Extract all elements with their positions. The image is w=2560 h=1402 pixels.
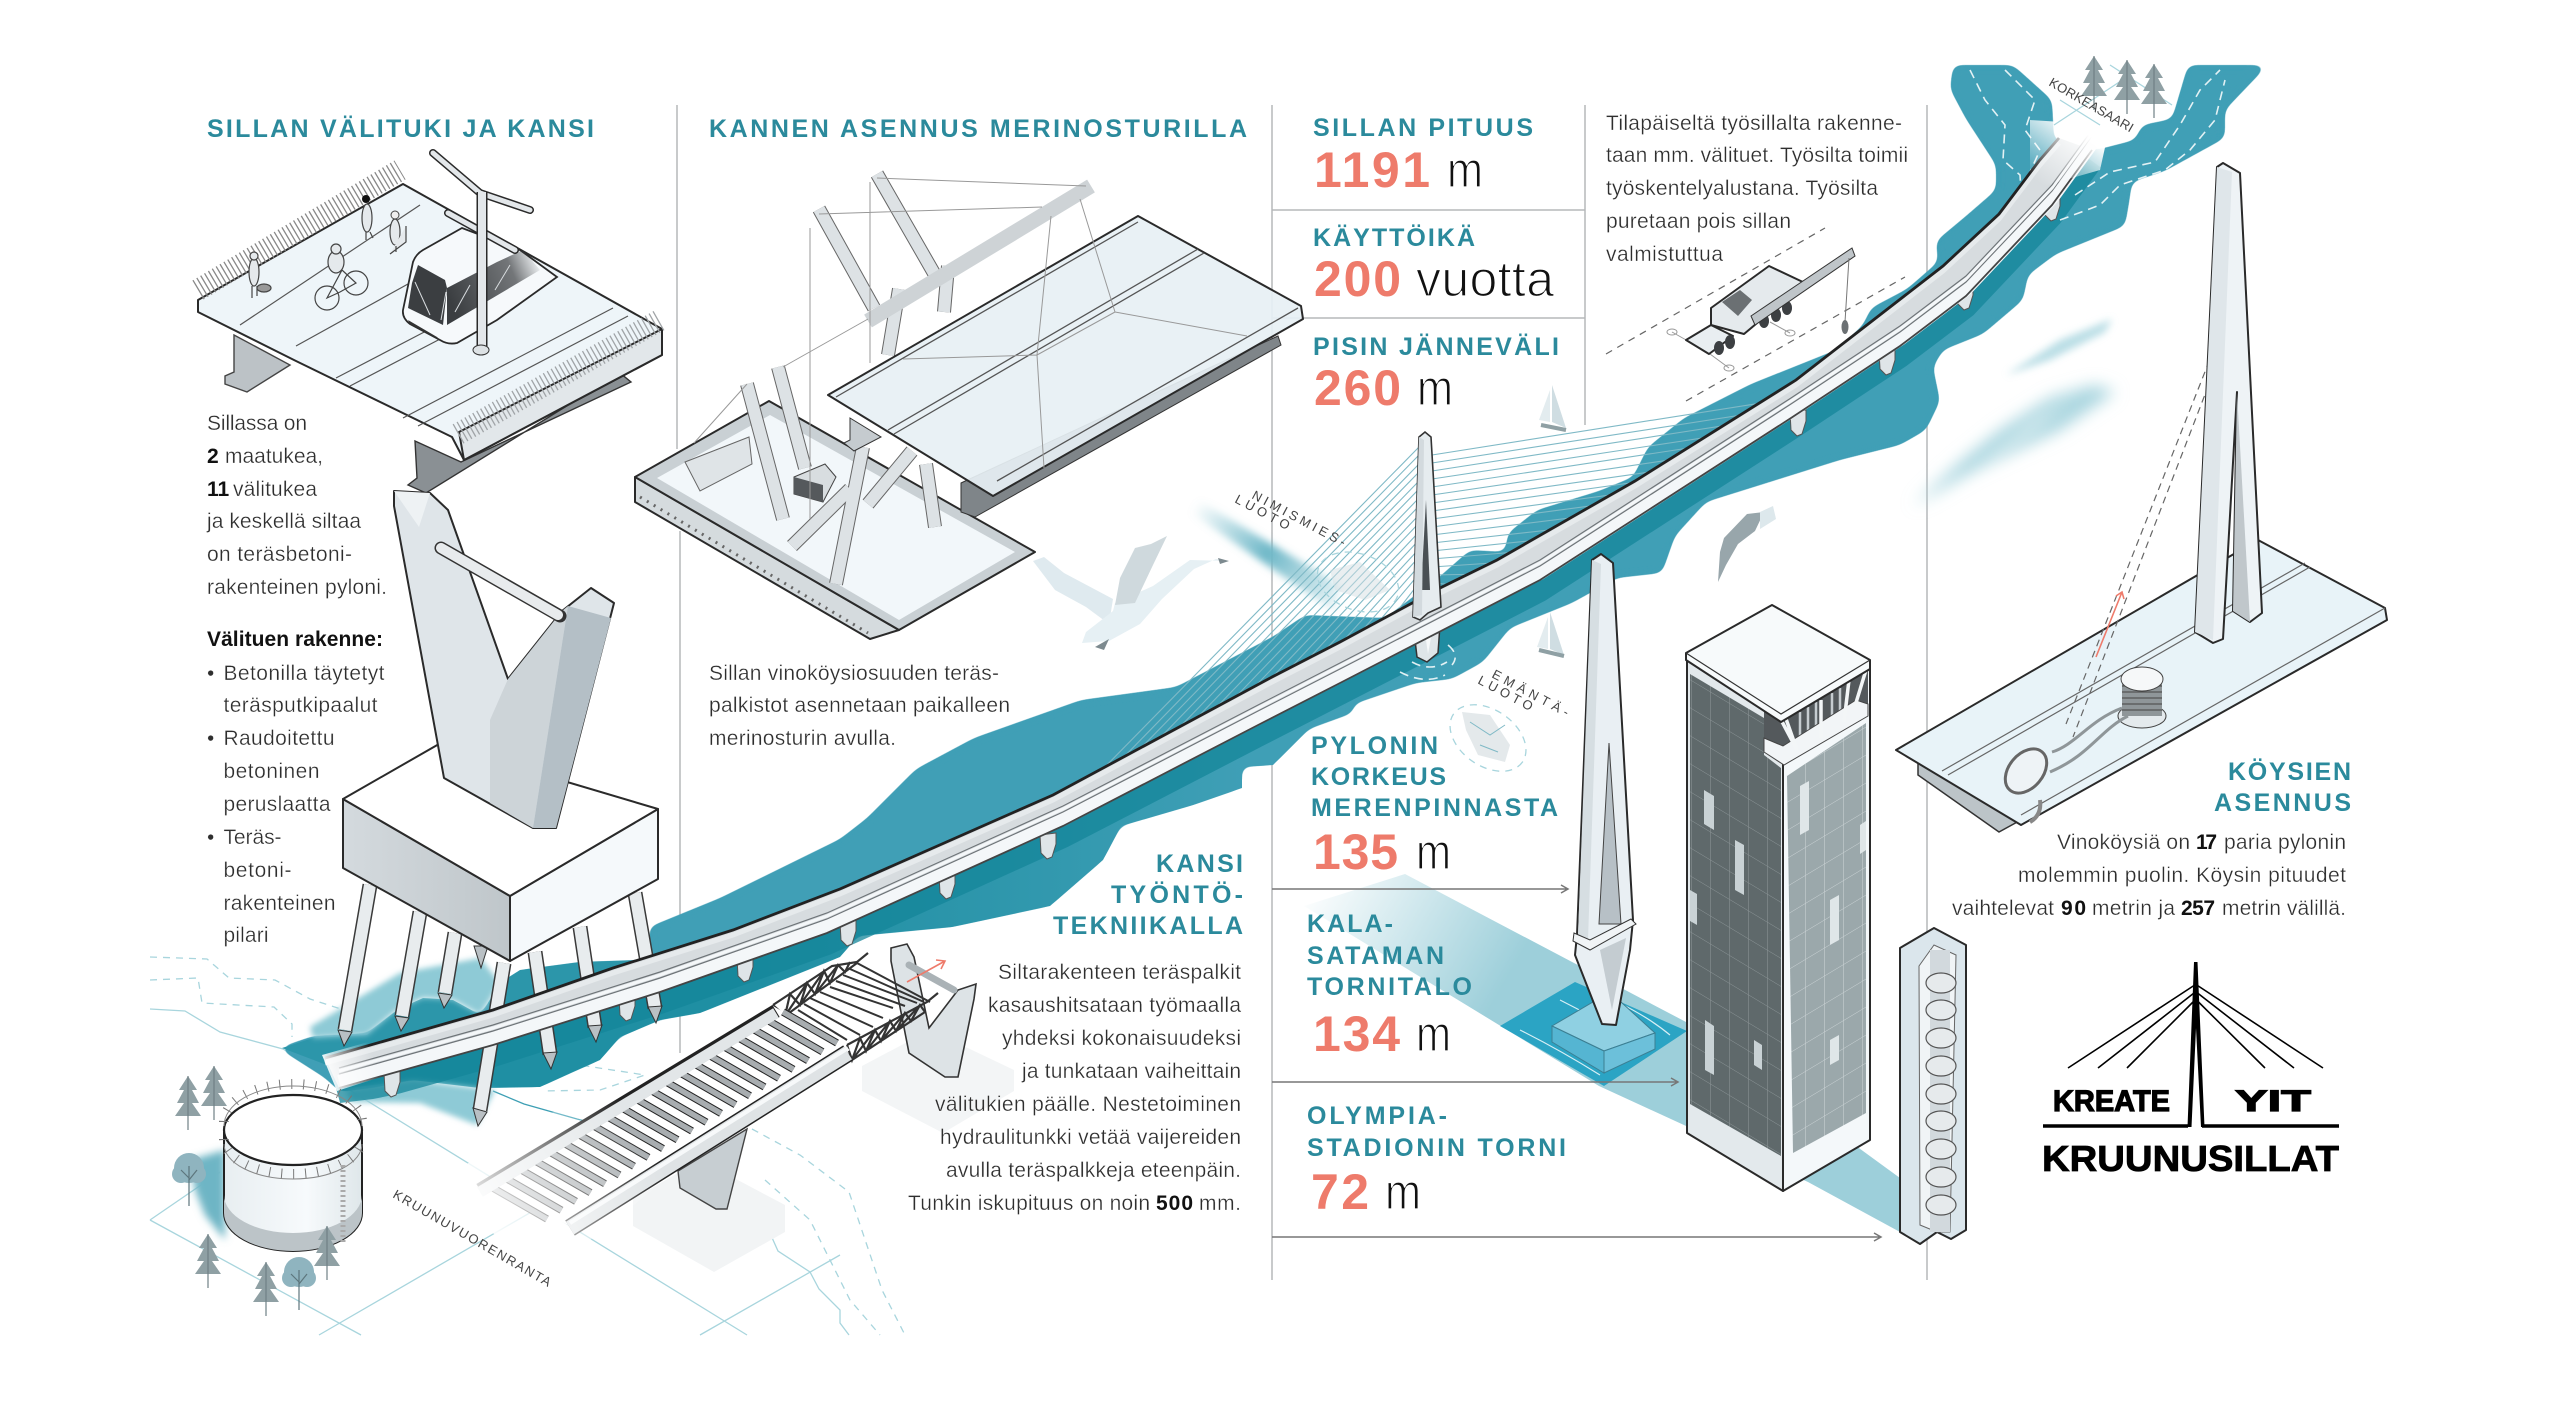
island: Nimismiesluoto: [1309, 541, 1407, 623]
tank rail: [224, 1084, 362, 1179]
stat: Olympic stadium tower height: [1307, 1102, 1566, 1220]
water: sea area under the bridge: [278, 65, 2268, 1125]
barge deck rim: [635, 401, 1035, 630]
dark shadow under deck: [339, 161, 2092, 1099]
stat: bridge length: 1191: [1314, 142, 1430, 198]
window highlights left: [1690, 790, 1762, 1075]
truck bed: [1686, 325, 1733, 354]
stat: Olympic stadium tower height: m: [1385, 1164, 1421, 1220]
place labels: KORKEASAARI: [2046, 75, 2136, 135]
text block: pier structure list: betoni-: [224, 859, 292, 882]
darker upper lobes: [282, 960, 640, 1070]
logo: Kruunusillat: [2042, 962, 2339, 1179]
tank shadow: [190, 1150, 225, 1240]
cable drum: [2118, 667, 2166, 728]
text block: pier structure list: rakenteinen: [224, 892, 336, 915]
launching nose truss: [773, 953, 938, 1060]
stat: Olympic stadium tower height: 72: [1311, 1164, 1369, 1220]
text block: cable installation: metrin välillä.: [2222, 897, 2346, 920]
recessed top floor: [1764, 668, 1868, 765]
pylon on deck: [2195, 163, 2262, 643]
place labels: LUOTO: [1476, 672, 1536, 714]
V pylon body: [394, 491, 614, 828]
place labels: KRUUNUVUORENRANTA: [390, 1187, 554, 1290]
text block: pier structure list: betoninen: [224, 760, 320, 783]
red direction arrow: [2096, 592, 2124, 657]
text block: cable installation: 90: [2061, 897, 2086, 920]
text block: deck and pier count: rakenteinen pyloni.: [207, 576, 387, 599]
stat: Olympic stadium tower height: OLYMPIA-: [1307, 1102, 1447, 1130]
shadow of the main pylon: [1190, 500, 1340, 612]
text block: temporary work bridge: valmistuttua: [1606, 243, 1723, 266]
text block: launching technique: välitukien päälle. Nestetoiminen: [935, 1093, 1241, 1116]
stat: bridge length: [1313, 114, 1533, 198]
text block: cable installation: 17: [2196, 831, 2217, 854]
hull wave pattern: [640, 497, 868, 633]
text block: deck and pier count: Sillassa on: [207, 412, 307, 435]
shadow band of the comparison towers: [1304, 874, 1900, 1232]
recess: [1919, 945, 1956, 1232]
crane arm: [1751, 248, 1855, 325]
beam below deck: [1918, 758, 2030, 832]
comparison: central pylon in water: [1500, 554, 1687, 1086]
pile foundation of the pier: [338, 885, 662, 1126]
ledge: [1764, 700, 1868, 765]
girder grid: [440, 1006, 850, 1280]
text block: cable installation: [1952, 831, 2346, 920]
deck ridges: [1942, 563, 2385, 815]
heading: Kansi työntötekniikalla: TYÖNTÖ-: [1111, 880, 1243, 909]
text block: cable installation: paria pylonin: [2224, 831, 2346, 854]
heading: Köysien asennus: KÖYSIEN: [2228, 757, 2351, 786]
window highlights right: [1800, 781, 1866, 1065]
steel beam left: [225, 335, 290, 392]
text block: pier structure list: peruslaatta: [224, 793, 331, 816]
illustration: launching of deck girders: [440, 944, 1014, 1280]
logo text KREATE: KREATE: [2053, 1085, 2170, 1118]
logo text Kruunusillat: KRUUNUSILLAT: [2042, 1138, 2339, 1179]
stat: pylon height: m: [1416, 824, 1451, 880]
ladder: [340, 1165, 346, 1245]
pylon shaded faces: [2195, 167, 2250, 640]
main bridge deck: [322, 120, 2110, 1091]
steel piles: [345, 885, 655, 1110]
deck rails: [836, 222, 1298, 481]
stat: service life: vuotta: [1416, 251, 1554, 307]
stat: Kalasatama tower height: KALA-: [1307, 910, 1393, 938]
map lines of the shoreline: [150, 957, 905, 1335]
pylon left face: [1578, 560, 1601, 940]
trees: [2081, 56, 2167, 118]
logo cables: [2068, 986, 2323, 1068]
text block: pier structure list: Raudoitettu: [224, 727, 334, 750]
right facade grid: [1787, 723, 1866, 1153]
cross bar highlight: [441, 548, 558, 615]
text block: deck and pier count: [206, 412, 387, 599]
stat: Olympic stadium tower height: STADIONIN TORNI: [1307, 1134, 1566, 1162]
dashed work bridge outline: [1606, 228, 1905, 401]
text block: launching technique: Siltarakenteen teräspalkit: [998, 961, 1241, 984]
wheels: [1714, 301, 1792, 355]
stat: pylon height: MERENPINNASTA: [1311, 794, 1558, 822]
truck body: [1711, 266, 1805, 334]
illustration: pier V pylon on foundation block: [343, 491, 658, 961]
text block: pier structure list: •: [207, 727, 214, 750]
text block: temporary work bridge: [1606, 112, 1908, 266]
tank body: [224, 1133, 362, 1251]
rear pier: [678, 1129, 747, 1209]
bar of the jack: [909, 965, 954, 990]
columns: [1779, 670, 1866, 750]
clouds: [1913, 319, 2115, 506]
road markings: [240, 205, 628, 426]
crane legs: [747, 174, 948, 584]
left face: [1687, 653, 1783, 1191]
V pylon faces: [394, 491, 611, 828]
crane ropes: [694, 178, 1086, 519]
hook: [1842, 320, 1848, 334]
crane boom: [868, 186, 1091, 321]
stat: longest span: 260: [1314, 360, 1401, 416]
pile tips: [338, 946, 662, 1126]
crane cab: [794, 464, 836, 502]
autonomous bus: [403, 228, 557, 344]
text block: cable installation: 257: [2181, 897, 2215, 920]
text block: launching technique: [908, 961, 1241, 1215]
text block: launching technique: 500: [1156, 1192, 1193, 1215]
red push arrow: [907, 960, 945, 982]
text block: deck and pier count: on teräsbetoni-: [207, 543, 352, 566]
pylon opening: [1599, 743, 1621, 924]
pylon lower opening: [1600, 938, 1626, 1010]
hold block: [685, 437, 752, 491]
text block: sea crane: [709, 662, 1010, 750]
illustration: sea crane lifting deck: [635, 174, 1303, 639]
heading: Kansi työntötekniikalla: TEKNIIKALLA: [1053, 912, 1243, 940]
stat: Kalasatama tower height: m: [1416, 1006, 1451, 1062]
place labels: NIMISMIES-: [1250, 487, 1348, 549]
logo pylon: [2188, 962, 2204, 1127]
main pylon above deck: [1413, 432, 1441, 620]
foundation block right face: [510, 809, 658, 961]
launching V pier: [891, 944, 976, 1077]
text block: cable installation: molemmin puolin. Köysin pituudet: [2018, 864, 2346, 887]
heading: Kannen asennus merinosturilla: KANNEN ASENNUS MERINOSTURILLA: [709, 115, 1247, 143]
lower leg of main pylon below deck: [1415, 625, 1440, 662]
steel beam rear: [844, 418, 881, 451]
hook line: [1845, 258, 1849, 322]
deck right side: [459, 329, 662, 460]
text block: pier structure list: Teräs-: [224, 826, 282, 849]
comparison: Olympic stadium tower: [1900, 928, 1966, 1244]
text block: launching technique: Tunkin iskupituus on noin: [908, 1192, 1150, 1215]
place labels: [390, 75, 2136, 1290]
pylon foundation: [1552, 992, 1655, 1073]
heading: Kansi työntötekniikalla: [1053, 850, 1243, 940]
heading: Köysien asennus: [2214, 757, 2351, 817]
stat: pylon height: PYLONIN: [1311, 732, 1438, 760]
text block: temporary work bridge: Tilapäiseltä työsillalta rakenne-: [1606, 112, 1902, 135]
tank roof: [224, 1095, 362, 1165]
spiral stair: [1926, 973, 1956, 1215]
text block: deck and pier count: 11: [207, 478, 230, 501]
stat: service life: KÄYTTÖIKÄ: [1313, 223, 1475, 252]
text block: pier structure list: [207, 628, 385, 947]
pylon crossbar: [1573, 919, 1636, 950]
deck plate: [1896, 540, 2387, 825]
barge hull: [635, 477, 899, 639]
stat: pylon height: KORKEUS: [1311, 763, 1446, 791]
comparison: Kalasatama tower building: [1686, 605, 1870, 1191]
stay cables of the main pylon: [1100, 400, 1780, 772]
logo text YIT: YIT: [2235, 1085, 2311, 1118]
truck cab: [1722, 290, 1752, 316]
stat: Kalasatama tower height: [1307, 910, 1472, 1062]
foundation block top: [343, 744, 658, 896]
column divider lines: [677, 105, 1927, 1280]
water ripples: [1520, 990, 1670, 1075]
deck fade at the west end: [322, 1041, 384, 1091]
text block: cable installation: Vinoköysiä on: [2057, 831, 2190, 854]
outriggers: [1667, 322, 1795, 371]
pylon: [1575, 554, 1633, 1025]
heading: Sillan välituki ja kansi: SILLAN VÄLITUKI JA KANSI: [207, 115, 594, 143]
text block: pier structure list: •: [207, 826, 214, 849]
text block: pier structure list: Betonilla täytetyt: [224, 662, 385, 685]
fences: [198, 170, 660, 434]
text block: pier structure list: •: [207, 662, 214, 685]
people and bicycle: [249, 195, 406, 310]
height comparison arrows: [1272, 885, 1881, 1241]
lifted deck: [828, 216, 1303, 496]
text block: deck and pier count: välitukea: [233, 478, 317, 501]
stat: longest span: PISIN JÄNNEVÄLI: [1313, 333, 1559, 361]
land at Korkeasaari with trees: [2054, 56, 2172, 125]
place labels: LUOTO: [1233, 491, 1293, 533]
stat: bridge length: m: [1447, 142, 1483, 198]
stat: pylon height: [1311, 732, 1558, 880]
text block: deck and pier count: maatukea,: [225, 445, 323, 468]
stat: Kalasatama tower height: SATAMAN: [1307, 942, 1444, 970]
text block: launching technique: kasaushitsataan työmaalla: [988, 994, 1241, 1017]
text block: sea crane: Sillan vinoköysiosuuden teräs-: [709, 662, 999, 685]
stat: longest span: [1313, 333, 1559, 416]
islands with labels: [1309, 541, 1538, 785]
barge inner floor: [657, 415, 1015, 620]
text block: pier structure list: teräsputkipaalut: [224, 694, 378, 717]
stat: pylon height: 135: [1313, 824, 1398, 880]
text block: cable installation: metrin ja: [2092, 897, 2175, 920]
trees: [172, 1066, 340, 1316]
heading: Köysien asennus: ASENNUS: [2214, 789, 2351, 817]
sailboats: [1537, 385, 1566, 656]
steel beam front: [961, 336, 1281, 517]
island: Emäntäluoto: [1438, 691, 1538, 785]
bridge piers in the water: [384, 195, 2060, 1097]
text block: temporary work bridge: taan mm. välituet. Työsilta toimii: [1606, 144, 1908, 167]
slings over deck: [903, 199, 1247, 468]
place labels: EMÄNTÄ-: [1490, 666, 1572, 720]
right face: [1783, 662, 1870, 1191]
logo base line: [2043, 1124, 2339, 1128]
text block: launching technique: avulla teräspalkkeja eteenpäin.: [946, 1159, 1241, 1182]
text block: temporary work bridge: työskentelyalustana. Työsilta: [1606, 177, 1878, 200]
roof: [1686, 605, 1870, 722]
deck fade at the east end: [2030, 120, 2110, 190]
swan: [1033, 536, 1229, 650]
tank base band: [224, 1195, 362, 1251]
text block: cable installation: vaihtelevat: [1952, 897, 2054, 920]
text block: deck and pier count: ja keskellä siltaa: [206, 510, 361, 533]
stat: Kalasatama tower height: TORNITALO: [1307, 973, 1472, 1001]
cross bar: [441, 548, 560, 616]
text block: deck and pier count: 2: [207, 445, 219, 468]
text block: pier structure list: pilari: [224, 924, 268, 947]
steel beam right: [408, 373, 631, 493]
cable coil and line: [1997, 708, 2128, 822]
water square: [1500, 982, 1687, 1086]
illustration: temporary work bridge with crane truck: [1606, 228, 1905, 401]
illustration: cable installation on deck: [1896, 163, 2387, 832]
street lamp: [433, 153, 530, 355]
ghost foundation front: [862, 1030, 1014, 1133]
white dashed depth contours: [1400, 70, 2225, 679]
deep water below the deck: [340, 700, 1309, 1089]
stat: Kalasatama tower height: 134: [1313, 1006, 1400, 1062]
text block: sea crane: palkistot asennetaan paikalleen: [709, 694, 1010, 717]
ghost foundation rear: [633, 1160, 785, 1272]
column of the stair: [1930, 950, 1950, 1232]
illustration: deck cross-section with users: [198, 153, 662, 493]
text block: launching technique: yhdeksi kokonaisuudeksi: [1002, 1027, 1241, 1050]
left facade grid: [1690, 674, 1781, 1156]
dashed cable guide: [2066, 316, 2227, 737]
text block: temporary work bridge: puretaan pois sillan: [1606, 210, 1791, 233]
stat: service life: 200: [1314, 251, 1401, 307]
stat: longest span: m: [1417, 360, 1453, 416]
heading: Kansi työntötekniikalla: KANSI: [1156, 850, 1243, 878]
roof edge: [1686, 653, 1870, 714]
stat: bridge length: SILLAN PITUUS: [1313, 114, 1533, 142]
text block: pier structure list: Välituen rakenne:: [207, 628, 383, 651]
light shallow water: [310, 958, 500, 1125]
stat: service life: [1313, 223, 1554, 307]
text block: launching technique: ja tunkataan vaiheittain: [1021, 1060, 1241, 1083]
text block: launching technique: mm.: [1199, 1192, 1241, 1215]
text block: sea crane: merinosturin avulla.: [709, 727, 896, 750]
text block: launching technique: hydraulitunkki vetää vaijereiden: [940, 1126, 1241, 1149]
illustration: steel tank with trees: [172, 1066, 362, 1316]
foundation block left face: [343, 799, 510, 961]
deck surface: [198, 184, 662, 460]
flying bird: [1718, 506, 1776, 582]
